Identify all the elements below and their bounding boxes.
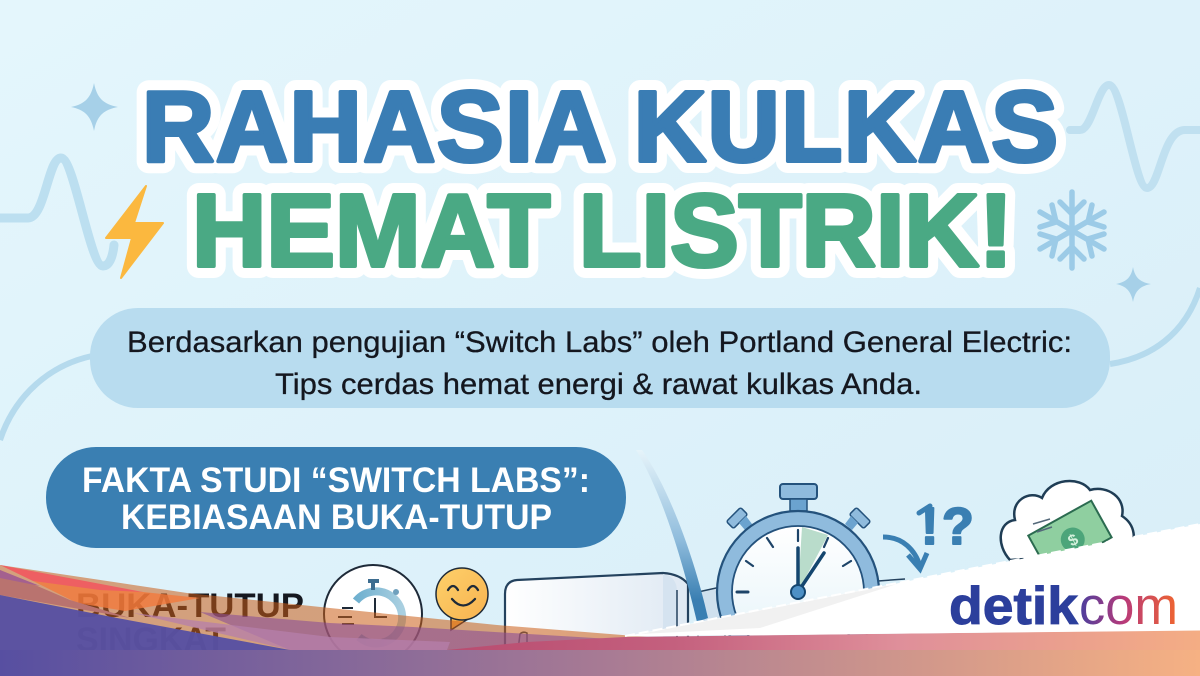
icon: sparkle left [71, 83, 118, 131]
fact label: short opening: SINGKAT [76, 621, 226, 659]
icon: smiley speech bubble [436, 568, 488, 630]
logo: detikcom: com [1079, 577, 1178, 636]
exclamation and question mark [919, 498, 974, 556]
title: HEMAT LISTRIK! [192, 173, 1013, 288]
icon: stopwatch [717, 484, 879, 673]
subtitle text: Tips cerdas hemat energi & rawat kulkas Anda. [275, 368, 922, 401]
right wave line [1070, 85, 1200, 188]
fact label: short opening: BUKA-TUTUP [76, 587, 304, 625]
icon: curved arrow [883, 537, 927, 569]
bottom decorative bands [0, 565, 1200, 676]
logo: detikcom: detik [949, 577, 1079, 636]
section heading pill [46, 447, 626, 548]
logo: detikcom [949, 577, 1178, 636]
fridge illustration [505, 573, 905, 660]
left wave line [0, 158, 114, 266]
section heading text: KEBIASAAN BUKA-TUTUP [121, 498, 552, 537]
right connector curve [1110, 288, 1200, 364]
title line 1: RAHASIA KULKAS [142, 71, 1058, 183]
title: RAHASIA KULKAS [142, 71, 1058, 183]
subtitle text: Berdasarkan pengujian “Switch Labs” oleh Portland General Electric: [127, 326, 1072, 359]
icon: lightning bolt [106, 186, 163, 278]
section heading text: FAKTA STUDI “SWITCH LABS”: [82, 461, 590, 500]
fact label: short opening [76, 587, 304, 659]
title [142, 71, 1058, 288]
icon: cloud with money [1001, 481, 1134, 572]
title line 2: HEMAT LISTRIK! [192, 173, 1013, 288]
icon: sparkle right [1116, 267, 1151, 302]
divider swoosh [636, 450, 708, 622]
white corner panel [625, 524, 1200, 636]
exclamation and question mark: ! [921, 498, 938, 556]
icon: fast stopwatch in circle [324, 565, 422, 663]
left connector curve [0, 356, 92, 440]
subtitle pill [90, 308, 1110, 408]
banknote: $ [1065, 531, 1082, 550]
exclamation and question mark: ? [942, 498, 974, 556]
icon: snowflake [1040, 192, 1104, 268]
